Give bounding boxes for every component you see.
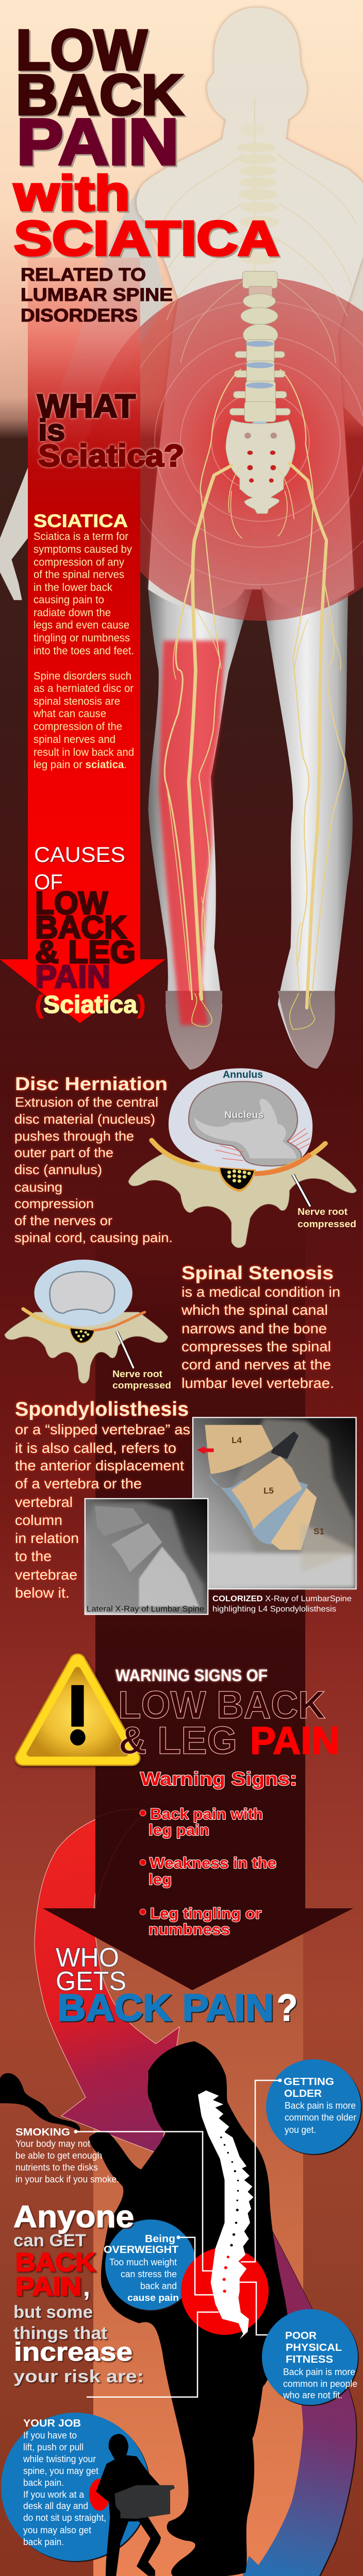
pain radius overlay xyxy=(89,278,363,621)
heading: who gets back pain xyxy=(56,1943,298,2029)
heading: what is sciatica: is xyxy=(38,414,65,447)
title xyxy=(13,19,279,266)
x-ray vertebra labels: L5 xyxy=(263,1486,274,1496)
spondylolisthesis text: Spondylolisthesis xyxy=(15,1398,189,1420)
right arm xyxy=(324,162,363,427)
spinal stenosis text: Spinal Stenosis xyxy=(182,1262,334,1283)
sacral foramina xyxy=(244,433,277,483)
title: SCIATICA xyxy=(14,211,279,266)
faint curve on dark arrow xyxy=(95,1809,155,1906)
worker lifting box xyxy=(89,2434,175,2576)
your job risk: while twisting your xyxy=(23,2453,96,2464)
being overweight risk: OVERWEIGHT xyxy=(104,2244,178,2256)
subtitle: LUMBAR SPINE xyxy=(21,285,173,305)
heading: causes of low back and leg pain: CAUSES xyxy=(34,842,125,867)
x-ray vertebra labels: S1 xyxy=(314,1527,324,1536)
your job risk: lift, push or pull xyxy=(23,2442,84,2452)
stenosis label: compressed xyxy=(112,1380,171,1391)
heading: causes of low back and leg pain: OF xyxy=(34,870,63,894)
orange prevention band xyxy=(93,1906,303,2576)
illustration: herniated disc xyxy=(128,1069,356,1248)
sciatica definition: spinal nerves and xyxy=(34,734,116,745)
sciatica definition: compression of any xyxy=(34,556,124,568)
herniated disc labels: Nucleus xyxy=(224,1110,263,1120)
being overweight risk xyxy=(104,2233,179,2303)
heading: who gets back pain: GETS xyxy=(56,1967,126,1996)
anyone can get back pain: PAIN xyxy=(15,2272,81,2301)
illustration: spinal stenosis xyxy=(5,1260,168,1383)
spinal stenosis text xyxy=(181,1262,340,1391)
sciatica definition xyxy=(33,511,134,771)
colorized x-ray caption xyxy=(212,1595,352,1614)
heading: who gets back pain: ? xyxy=(277,1987,298,2029)
smoking risk: nutrients to the disks xyxy=(15,2162,98,2173)
spinal stenosis text: cord and nerves at the xyxy=(182,1357,331,1372)
spinal stenosis text: which the spinal canal xyxy=(181,1302,328,1318)
disc herniation text: pushes through the xyxy=(14,1128,134,1144)
disc herniation text: outer part of the xyxy=(14,1145,113,1160)
warning signs heading xyxy=(116,1666,339,1762)
getting older risk: you get. xyxy=(285,2124,316,2135)
smoking risk: in your back if you smoke. xyxy=(15,2174,119,2184)
sciatica definition: Sciatica is a term for xyxy=(34,531,128,543)
poor fitness circle xyxy=(262,2309,358,2405)
heading: what is sciatica: Sciatica? xyxy=(38,438,184,473)
sciatica definition: causing pain to xyxy=(34,594,104,606)
getting older risk: GETTING xyxy=(284,2076,334,2088)
sciatica definition: as a herniated disc or xyxy=(34,683,134,694)
subtitle: DISORDERS xyxy=(21,306,138,326)
heading: who gets back pain: WHO xyxy=(56,1943,119,1973)
heading: who gets back pain: BACK PAIN xyxy=(57,1987,274,2029)
sciatica definition: into the toes and feet. xyxy=(34,645,134,657)
anyone can get back pain xyxy=(13,2199,144,2386)
anyone can get back pain: your risk are: xyxy=(13,2367,144,2386)
warning signs list: Weakness in the xyxy=(150,1855,276,1872)
spondylolisthesis text: it is also called, refers to xyxy=(15,1440,176,1456)
warning signs list: leg xyxy=(148,1871,172,1888)
anyone can get back pain: Anyone xyxy=(13,2199,134,2234)
risk connector lines xyxy=(76,2080,280,2397)
sciatic nerves xyxy=(164,369,345,1008)
stenosis label xyxy=(112,1369,171,1391)
spinal stenosis text: compresses the spinal xyxy=(182,1338,331,1354)
title: LOW xyxy=(16,19,147,82)
foot nerves xyxy=(192,993,315,1029)
poor physical fitness risk: Back pain is more xyxy=(283,2366,355,2377)
being overweight risk: back and xyxy=(140,2280,177,2291)
disc herniation text xyxy=(14,1073,173,1245)
purple to blue arrow xyxy=(218,2225,356,2576)
your job risk: If you have to xyxy=(23,2430,77,2441)
heading: what is sciatica xyxy=(37,387,184,473)
poor physical fitness risk: PHYSICAL xyxy=(286,2342,342,2353)
disc herniation text: disc (annulus) xyxy=(14,1162,102,1177)
lower back pain spot xyxy=(181,2247,269,2335)
title: with xyxy=(13,166,130,221)
lateral x-ray xyxy=(85,1499,208,1614)
heading: causes of low back and leg pain xyxy=(34,842,145,1019)
disc herniation text: of the nerves or xyxy=(14,1213,112,1228)
warning signs list: numbness xyxy=(148,1921,230,1938)
buttocks and hips xyxy=(148,467,354,611)
spondylolisthesis text: the anterior displacement xyxy=(15,1458,184,1473)
warning signs heading: LOW BACK xyxy=(118,1683,325,1726)
anyone can get back pain: but some xyxy=(13,2302,93,2322)
dark warning band xyxy=(43,1185,353,1990)
title: BACK xyxy=(16,63,183,127)
disc herniation text: Disc Herniation xyxy=(15,1073,168,1094)
white spine xyxy=(198,2091,254,2339)
spondylolisthesis text: column xyxy=(15,1512,62,1528)
anyone can get back pain: can GET xyxy=(13,2231,86,2250)
heading: causes of low back and leg pain: (Sciatica) xyxy=(35,991,145,1019)
colorized x-ray caption: highlighting L4 Spondylolisthesis xyxy=(212,1605,336,1614)
smoking risk: be able to get enough xyxy=(15,2150,102,2161)
disc herniation text: compression xyxy=(14,1196,94,1211)
sciatica definition: symptoms caused by xyxy=(34,544,132,555)
sacrum xyxy=(226,419,295,514)
smoking risk xyxy=(15,2127,119,2184)
warning signs list: leg pain xyxy=(148,1822,209,1839)
sciatica definition: radiate down the xyxy=(34,607,111,619)
left leg xyxy=(148,589,252,1070)
warning triangle icon xyxy=(23,1661,132,1758)
spinal stenosis text: lumbar level vertebrae. xyxy=(182,1375,334,1391)
warning signs heading: PAIN xyxy=(250,1719,339,1762)
heading: what is sciatica: WHAT xyxy=(37,387,136,425)
heading: causes of low back and leg pain: LOW xyxy=(35,886,108,921)
being overweight risk: Being xyxy=(145,2233,175,2245)
poor physical fitness risk: who are not fit. xyxy=(283,2389,342,2400)
your job risk: desk all day and xyxy=(23,2500,88,2511)
sciatica definition: compression of the xyxy=(34,721,122,733)
colorized x-ray xyxy=(193,1417,356,1589)
warning signs list: Warning Signs: xyxy=(140,1768,297,1789)
sciatica definition: result in low back and xyxy=(34,747,134,758)
being overweight risk: Too much weight xyxy=(109,2257,177,2267)
your job risk: If you work at a xyxy=(23,2489,85,2500)
getting older risk xyxy=(284,2076,356,2135)
spinal stenosis text: is a medical condition in xyxy=(182,1284,340,1300)
curved red arrow xyxy=(35,1809,179,2155)
x-ray vertebra labels: L4 xyxy=(232,1435,242,1445)
herniated disc labels xyxy=(223,1070,356,1229)
title: PAIN xyxy=(16,105,179,178)
disc herniation text: Extrusion of the central xyxy=(15,1094,158,1110)
getting older risk: OLDER xyxy=(284,2088,322,2099)
warning signs heading: WARNING SIGNS OF xyxy=(116,1666,268,1685)
spondylolisthesis text: below it. xyxy=(15,1585,70,1601)
disc herniation text: disc material (nucleus) xyxy=(14,1111,155,1127)
your job risk: you may also get xyxy=(23,2524,91,2535)
illustration: spine and nerves xyxy=(157,98,356,1029)
lumbar vertebrae xyxy=(229,271,290,422)
heading: causes of low back and leg pain: PAIN xyxy=(35,959,110,995)
anyone can get back pain: BACK xyxy=(15,2248,95,2277)
anyone can get back pain: things that xyxy=(13,2324,107,2343)
your job risk: back pain. xyxy=(23,2477,64,2488)
warning signs list: Leg tingling or xyxy=(150,1905,261,1922)
heading: causes of low back and leg pain: BACK xyxy=(35,910,127,945)
man silhouette xyxy=(0,2041,288,2576)
illustration: human back with sciatic nerves xyxy=(0,8,363,1070)
spinal stenosis text: narrows and the bone xyxy=(182,1320,327,1336)
spinal discs xyxy=(246,341,274,427)
connector dots xyxy=(74,2078,282,2425)
getting older risk: Back pain is more xyxy=(285,2100,356,2111)
faint upper nerves xyxy=(157,98,356,363)
your job risk: back pain. xyxy=(23,2536,64,2547)
sciatica definition: SCIATICA xyxy=(34,511,128,531)
spondylolisthesis text: vertebral xyxy=(15,1494,73,1510)
smoking risk: SMOKING xyxy=(15,2127,70,2138)
right leg xyxy=(258,538,354,1069)
your job risk: YOUR JOB xyxy=(23,2418,81,2429)
anyone can get back pain: , xyxy=(83,2273,90,2301)
sciatica definition: tingling or numbness xyxy=(34,632,130,644)
subtitle: RELATED TO xyxy=(21,265,146,285)
leg pain glow xyxy=(159,641,226,1025)
spondylolisthesis text: in relation xyxy=(15,1530,79,1546)
dark arrow over curve xyxy=(43,1803,353,1990)
spondylolisthesis text: vertebrae xyxy=(15,1567,77,1583)
spondylolisthesis text: of a vertebra or the xyxy=(15,1476,142,1492)
poor physical fitness risk: POOR xyxy=(285,2330,317,2342)
stenosis label: Nerve root xyxy=(112,1369,162,1379)
spondylolisthesis text: or a “slipped vertebrae” as xyxy=(15,1421,190,1437)
left arm xyxy=(0,188,167,600)
being overweight risk: can stress the xyxy=(121,2268,177,2279)
poor physical fitness risk xyxy=(283,2330,357,2400)
spondylolisthesis text xyxy=(15,1398,190,1601)
sciatica definition: legs and even cause xyxy=(34,619,129,631)
sciatica definition: Spine disorders such xyxy=(34,670,131,682)
poor physical fitness risk: common in people xyxy=(283,2378,357,2389)
warning signs list xyxy=(140,1768,297,1938)
feet shading xyxy=(166,991,335,1070)
upper vertebrae xyxy=(236,124,279,265)
spondylolisthesis text: to the xyxy=(15,1548,52,1564)
smoking risk: Your body may not xyxy=(15,2138,90,2149)
lateral x-ray caption: Lateral X-Ray of Lumbar Spine xyxy=(87,1605,204,1614)
sciatica definition: what can cause xyxy=(33,708,106,720)
poor physical fitness risk: FITNESS xyxy=(286,2354,333,2365)
colorized x-ray caption: COLORIZED X-Ray of LumbarSpine xyxy=(212,1595,352,1603)
head and torso xyxy=(137,8,363,589)
panel: red down arrow xyxy=(0,258,166,1023)
your job risk: spine, you may get xyxy=(23,2465,98,2476)
disc herniation text: causing xyxy=(14,1179,62,1195)
subtitle xyxy=(21,265,173,326)
sciatica definition: of the spinal nerves xyxy=(34,569,124,581)
disc herniation text: spinal cord, causing pain. xyxy=(14,1230,173,1245)
your job circle xyxy=(1,2413,150,2561)
your job risk xyxy=(23,2418,106,2547)
anyone can get back pain: increase xyxy=(14,2337,133,2366)
herniated disc labels: compressed xyxy=(298,1219,356,1229)
sciatica definition: in the lower back xyxy=(34,582,112,594)
sciatica definition: leg pain or sciatica. xyxy=(34,759,127,771)
herniated disc labels: Annulus xyxy=(223,1070,263,1080)
warning signs heading: & LEG xyxy=(119,1719,237,1762)
warning signs list: Back pain with xyxy=(150,1806,263,1823)
heading: causes of low back and leg pain: & LEG xyxy=(35,935,136,970)
being overweight risk: cause pain xyxy=(127,2292,179,2303)
blue risk circles xyxy=(105,2059,361,2310)
your job risk: do not sit up straight, xyxy=(23,2512,106,2523)
getting older risk: common the older xyxy=(285,2112,356,2123)
herniated disc labels: Nerve root xyxy=(298,1207,348,1217)
x-ray vertebra labels xyxy=(232,1435,324,1536)
sciatica definition: spinal stenosis are xyxy=(34,696,120,707)
